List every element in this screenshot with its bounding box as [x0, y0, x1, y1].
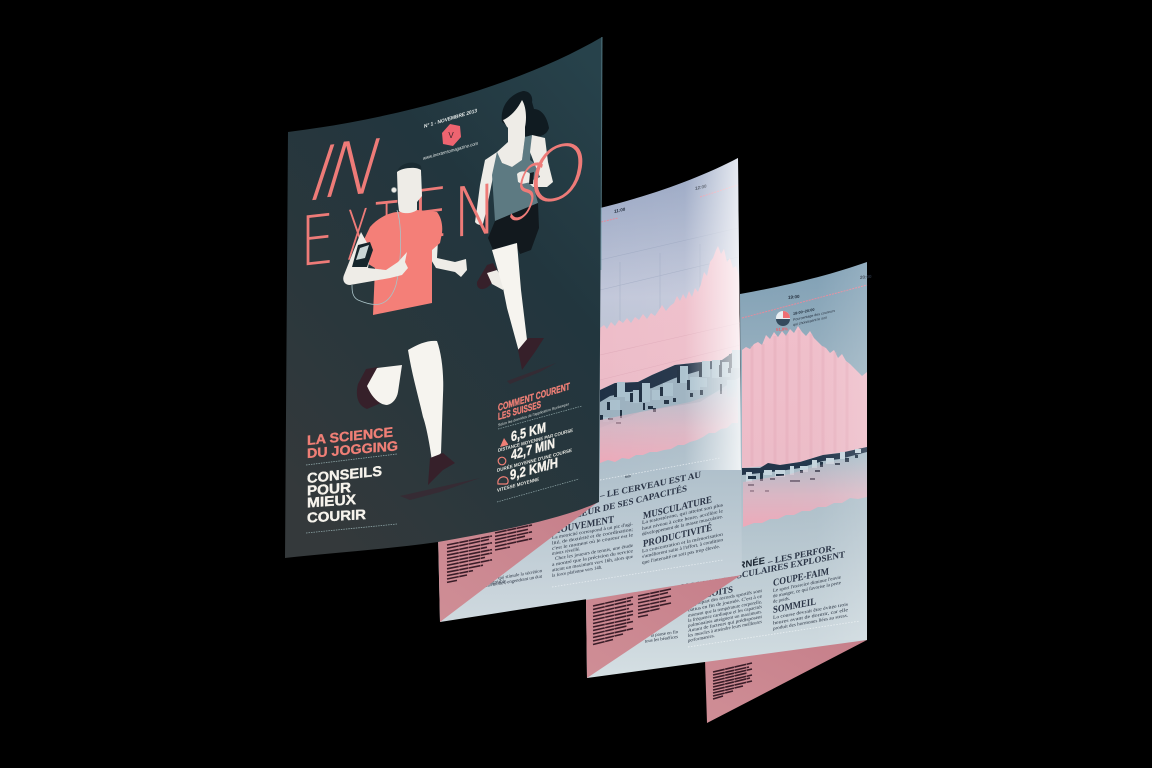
figure: man runner [343, 163, 480, 500]
headline: la science du jogging: LA SCIENCE [307, 424, 393, 448]
evening pie legend: 18:00–20:00 [793, 308, 815, 316]
evening article column: exploits: La plupart des records sportifs sont [688, 589, 763, 608]
midday article column: mouvement: atteint un maximum vers 16h, alors que [552, 555, 633, 573]
evening fragment under fold: la pause en fin [651, 630, 679, 639]
woman tank top [492, 135, 540, 221]
midday article column: musculature and productivite: La testostérone, qui atteint son plus [642, 503, 723, 526]
icon: shoe [500, 438, 508, 447]
midday article column: mouvement: mieux réveillé. [552, 547, 580, 557]
man front shoe [428, 453, 455, 485]
evening skyline [742, 447, 867, 492]
evening pie legend: Pourcentage des coureurs [793, 309, 835, 322]
panel: evening page pink fold [586, 575, 741, 678]
evening article column: exploits: Autant de facteurs qui prédisposent [688, 615, 763, 634]
midday fragment under fold: agréable. [490, 579, 507, 586]
evening article column: exploits: la fréquence cardiaque et les capacités [688, 605, 762, 624]
evening pie legend: qui choisissent le soir [793, 315, 828, 327]
stat: duration [497, 436, 573, 474]
midday article column: musculature and productivite: La concentration et la mémorisation [642, 532, 724, 554]
title: IN EXTENSO: O [521, 124, 594, 225]
woman hair [502, 91, 549, 137]
stat: duration: 42,7 MIN [511, 436, 555, 464]
woman hand [517, 171, 531, 184]
evening article column: exploits: performances. [688, 634, 715, 644]
midday article column: musculature and productivite: s'améliorent suite à l'effort, à condition [642, 538, 724, 560]
figure: woman runner [475, 91, 556, 384]
midday time axis: 11:00 [614, 206, 626, 214]
title: IN EXTENSO: N [453, 170, 497, 254]
title: IN EXTENSO: N [312, 123, 396, 217]
evening article column: coupe-faim and sommeil: SOMMEIL [773, 596, 816, 616]
stat: distance: DISTANCE MOYENNE PAR COURSE [498, 428, 574, 454]
evening article column: coupe-faim and sommeil: Le sport l'exercice diminue l'envie [773, 575, 841, 594]
headline: la science du jogging: DU JOGGING [307, 438, 398, 461]
man back shoe [357, 367, 381, 409]
midday fragment under fold: qui stimule la sécrétion [498, 569, 543, 581]
woman neck and chest [497, 125, 525, 167]
evening article column: exploits [688, 584, 763, 644]
headline: conseils pour mieux courir: MIEUX [307, 491, 357, 510]
evening pie legend [776, 308, 835, 332]
midday article column: mouvement: Chez les joueurs de tennis, une étude [555, 544, 633, 562]
title: IN EXTENSO [297, 123, 594, 283]
midday article column: mouvement [552, 514, 633, 579]
man shirt [359, 210, 442, 315]
woman back shoe [477, 263, 497, 289]
evening article column: coupe-faim and sommeil [773, 566, 848, 632]
stat: speed: VITESSE MOYENNE [497, 477, 540, 494]
man hair [397, 163, 422, 176]
midday article column: mouvement: la force plafonne vers 14h. [552, 565, 602, 579]
cover website: www.inextensomagazine.com [423, 141, 478, 162]
evening lower pink band [743, 456, 867, 527]
midday article heading: – LE CERVEAU EST AU [599, 469, 701, 501]
evening article heading: MANCES MUSCULAIRES EXPLOSENT [681, 549, 845, 592]
midday article column: mouvement: c'est le moment où le coureur est le [552, 533, 633, 552]
evening page paper [586, 262, 867, 678]
evening article heading: – LES PERFOR- [767, 543, 835, 567]
midday article column: musculature and productivite: que l'intensité ne soit pas trop élevée. [642, 545, 720, 566]
evening time axis [742, 274, 872, 318]
stat: speed [497, 455, 558, 494]
man back leg [367, 365, 402, 405]
evening article heading: JOURNÉE [719, 555, 766, 576]
evening area chart [742, 326, 867, 468]
midday fragment under fold: d'hormones, engendrant un état [483, 574, 543, 589]
man right arm [430, 240, 467, 277]
stats heading: LES SUISSES [498, 400, 541, 423]
woman watch [529, 172, 534, 184]
midday article heading [552, 469, 701, 525]
evening fragment under fold: tous les bénéfices [645, 635, 678, 645]
woman shadow [507, 363, 556, 384]
woman shoe [518, 338, 544, 370]
headline: la science du jogging [307, 424, 398, 461]
woman left arm [475, 152, 497, 225]
icon: stopwatch [498, 457, 506, 465]
evening fragment under fold [645, 630, 679, 645]
midday article column: mouvement: a montré que la précision du service [552, 549, 633, 568]
midday edge light [600, 158, 741, 470]
headline: conseils pour mieux courir: POUR [307, 479, 351, 498]
evening time axis: 20:00 [860, 274, 872, 280]
panel: midday page [438, 158, 742, 622]
evening article column: coupe-faim and sommeil: de manger, ce qui favorise la perte [773, 581, 841, 599]
icon: hexagon logo: V [448, 131, 454, 140]
midday article column: mouvement: MOUVEMENT [552, 514, 614, 537]
man front leg [408, 341, 443, 462]
man neck and face [397, 168, 422, 213]
woman face [503, 100, 526, 130]
midday article column: musculature and productivite: développement de la masse musculaire. [642, 515, 723, 537]
icon: earbud [392, 188, 396, 192]
evening article column: coupe-faim and sommeil: COUPE-FAIM [773, 566, 829, 589]
midday skyline [600, 350, 740, 428]
midday small label: MIDI [625, 474, 631, 479]
cover issue line: N° 1 - NOVEMBRE 2013 [424, 108, 477, 130]
headline: conseils pour mieux courir [307, 463, 382, 525]
evening article column: exploits: EXPLOITS [688, 584, 733, 603]
woman right arm [528, 135, 553, 187]
evening article column: coupe-faim and sommeil: de poids. [773, 597, 790, 605]
midday lower pink band [600, 385, 738, 463]
stats heading: COMMENT COURENT [498, 381, 571, 414]
fold text lines [593, 589, 671, 644]
evening article column: coupe-faim and sommeil: produit des hormones liées au stress. [773, 614, 848, 632]
woman front leg [492, 243, 527, 352]
evening article column: coupe-faim and sommeil: heures avant de dormir, car elle [773, 608, 848, 626]
title: IN EXTENSO: E [412, 172, 448, 256]
evening edge light [742, 262, 867, 640]
headline: conseils pour mieux courir: CONSEILS [307, 463, 382, 486]
evening article column: exploits: battus en fin de journée. C'est à ce [688, 594, 762, 613]
evening article column: exploits: les muscles à atteindre leurs meilleures [688, 620, 762, 639]
midday article column: musculature and productivite: haut niveau à cette heure, accélère le [642, 509, 723, 532]
midday grid [600, 228, 738, 390]
stat: distance: 6,5 KM [511, 420, 546, 445]
title: IN EXTENSO: T [375, 188, 398, 269]
stat: speed: 9,2 KM/H [510, 455, 558, 484]
midday article column: musculature and productivite [642, 495, 724, 566]
midday article heading: MEILLEUR DE SES CAPACITÉS [552, 483, 687, 525]
icon: speedometer [498, 477, 508, 484]
man earphone cable [352, 210, 401, 305]
midday article column: mouvement: La motricité correspond à un pic d'agi- [552, 522, 633, 541]
icon: hexagon logo [442, 124, 461, 146]
back page text lines [713, 663, 752, 699]
evening article column: exploits: pulmonaires atteignent un maximum. [688, 610, 762, 629]
cover paper [285, 37, 602, 558]
evening article column: coupe-faim and sommeil: La course devrait être évitée trois [773, 602, 848, 621]
fold text lines [447, 525, 532, 582]
evening pie legend: 51,8% [776, 326, 788, 332]
title: IN EXTENSO: E [300, 198, 335, 283]
title: IN EXTENSO: S [499, 147, 552, 241]
woman shorts [488, 203, 539, 254]
evening time axis: 19:00 [788, 294, 800, 300]
stats block: comment courent les suisses: Selon les données de l'application Runkeeper [498, 401, 570, 427]
midday page paper [438, 158, 742, 622]
midday article column: musculature and productivite: MUSCULATURE [643, 495, 712, 522]
midday area chart [600, 246, 740, 390]
midday time axis: 12:00 [695, 183, 707, 191]
midday article column: musculature and productivite: PRODUCTIVITÉ [643, 522, 712, 550]
panel: magazine cover [285, 37, 602, 558]
man shadow [400, 478, 480, 500]
icon: phone armband [352, 242, 373, 267]
title: IN EXTENSO: X [346, 194, 369, 276]
midday time axis [601, 183, 738, 222]
panel: evening page [586, 262, 872, 678]
stats heading [498, 381, 571, 423]
panel: back page fold [705, 640, 867, 723]
evening article column: exploits: moment que la température corporelle, [688, 600, 762, 619]
midday article column: mouvement: lité, de dextérité et de coordination; [552, 528, 633, 546]
headline: conseils pour mieux courir: COURIR [307, 506, 366, 525]
man left arm [343, 232, 408, 285]
stat: duration: DURÉE MOYENNE D'UNE COURSE [497, 446, 573, 474]
panel: midday page pink fold [438, 502, 598, 622]
title: IN EXTENSO: I [297, 129, 349, 219]
stats block: comment courent les suisses [497, 381, 582, 502]
woman back leg [487, 270, 505, 290]
